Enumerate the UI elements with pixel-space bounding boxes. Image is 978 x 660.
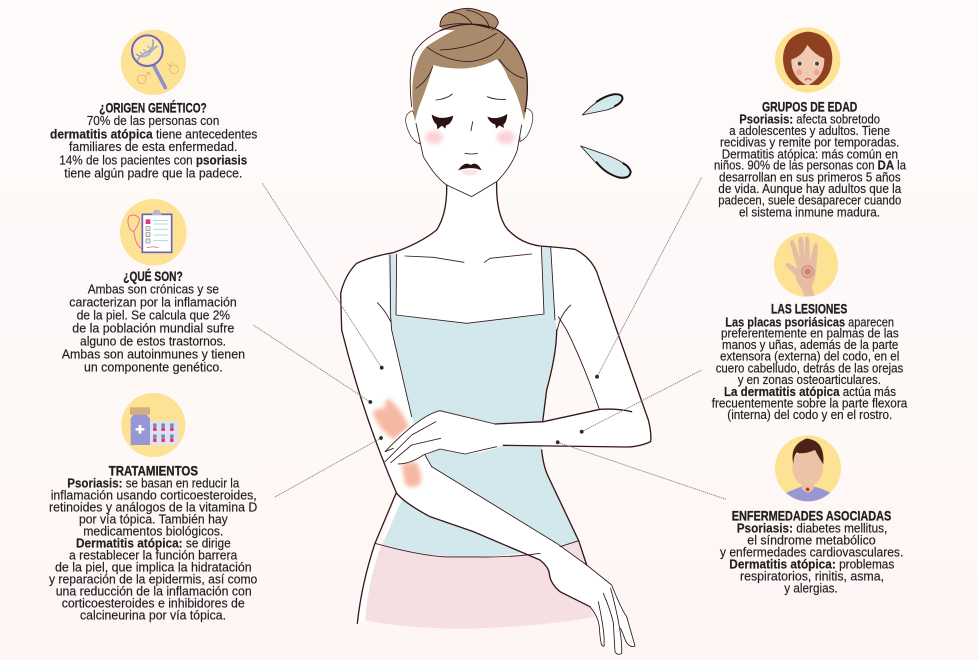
text block: grupos de edad: padecen, suele desaparecer cuando [718,193,901,208]
text block: enfermedades asociadas: y alergias. [784,581,838,596]
neck and chest [396,182,544,323]
skin patches [373,399,421,487]
text block: grupos de edad: GRUPOS DE EDAD [762,99,857,114]
icon: person with throat mark [775,435,841,503]
heading block: tratamientos: retinoides y análogos de la vitamina D [49,499,257,514]
text block: enfermedades asociadas: y enfermedades cardiovasculares. [720,545,903,560]
tear drops [581,94,631,178]
icon: clipboard and stethoscope [120,199,187,266]
text block: las lesiones: preferentemente en palmas de las [721,326,899,341]
text block: grupos de edad: recidivas y remite por temporadas. [720,135,899,150]
icon: magnifier over DNA [121,30,186,95]
heading block: tratamientos: y reparación de la epidermis, así como [49,571,257,586]
heading block: tratamientos: por vía tópica. También hay [79,511,228,526]
heading block: origen genético: dermatitis atópica tiene antecedentes [50,126,258,141]
face [415,57,525,197]
heading block: origen genético: familiares de esta enfermedad. [69,139,237,154]
text block: las lesiones: y en zonas osteoarticulares. [738,372,881,387]
heading block: tratamientos: corticoesteroides e inhibidores de [62,595,245,610]
heading block: tratamientos: de la piel, que implica la hidratación [55,559,252,574]
text block: enfermedades asociadas: respiratorios, rinitis, asma, [740,569,884,584]
heading block: tratamientos: calcineurina por vía tópica. [80,607,226,622]
text block: grupos de edad: de vida. Aunque hay adultos que la [718,181,902,196]
text block: las lesiones [712,302,908,422]
text block: grupos de edad: a adolescentes y adultos. Tiene [729,123,890,138]
heading block: origen genético: 14% de los pacientes con psoriasis [59,152,247,167]
heading block: tratamientos: TRATAMIENTOS [109,464,198,479]
text block: las lesiones: extensora (externa) del codo, en el [720,349,899,364]
text block: las lesiones: frecuentemente sobre la parte flexora [712,395,908,410]
heading block: qué son: Ambas son crónicas y se [88,281,219,296]
heading block: qué son: un componente genético. [84,359,223,374]
icon: hand with lesion [774,233,838,297]
heading block: tratamientos: a restablecer la función barrera [69,547,238,562]
text block: enfermedades asociadas [720,509,903,596]
heading block: qué son: ¿QUÉ SON? [123,269,183,284]
hair bun [440,8,498,31]
text block: enfermedades asociadas: ENFERMEDADES ASOCIADAS [732,509,891,524]
icon: woman with sad face [775,27,840,93]
text block: las lesiones: cuero cabelludo, detrás de las orejas [716,360,904,375]
heading block: origen genético: tiene algún padre que la padece. [64,165,242,180]
leader lines [253,177,726,499]
text block: las lesiones: manos y uñas, además de la parte [722,337,898,352]
heading block: tratamientos: una reducción de la inflamación con [56,583,252,598]
text block: grupos de edad: Dermatitis atópica: más común en [722,146,898,161]
text block: grupos de edad [714,99,907,220]
hair strands [410,8,527,112]
text block: enfermedades asociadas: el síndrome metabólico [747,533,876,548]
illustration: woman with skin lesions [340,8,651,655]
heading block: tratamientos [49,464,257,622]
heading block: tratamientos: Dermatitis atópica: se dirige [76,535,231,550]
body outline [341,123,651,654]
skirt [365,541,595,629]
heading block: qué son: de la población mundial sufre [72,320,234,335]
tank top [382,247,579,557]
text block: enfermedades asociadas: Psoriasis: diabetes mellitus, [737,521,887,536]
text block: grupos de edad: niños. 90% de las personas con DA la [714,158,907,173]
icon: medicine bottle and pills [121,393,185,457]
heading block: origen genético: ¿ORIGEN GENÉTICO? [99,101,207,116]
heading block: origen genético: 70% de las personas con [87,113,219,128]
text block: grupos de edad: Psoriasis: afecta sobretodo [739,111,880,126]
left arm [340,254,635,655]
text block: grupos de edad: el sistema inmune madura. [739,205,880,220]
text block: las lesiones: (interna) del codo y en el rostro. [727,407,892,422]
marker dots [368,366,599,444]
text block: grupos de edad: desarrollan en sus primeros 5 años [719,169,901,184]
text block: las lesiones: Las placas psoriásicas aparecen [725,315,894,330]
text block: las lesiones: La dermatitis atópica actúa más [724,384,896,399]
heading block: qué son: Ambas son autoinmunes y tienen [62,346,245,361]
text block: enfermedades asociadas: Dermatitis atópica: problemas [729,557,895,572]
text block: las lesiones: LAS LESIONES [771,302,847,317]
heading block: tratamientos: Psoriasis: se basan en reducir la [67,475,240,490]
heading block: qué son: alguno de estos trastornos. [80,333,226,348]
hair [412,24,528,122]
heading block: qué son: caracterizan por la inflamación [69,294,237,309]
face features [425,94,515,175]
heading block: tratamientos: inflamación usando corticoesteroides, [51,487,257,502]
lower torso skin [357,493,403,623]
heading block: tratamientos: medicamentos biológicos. [83,523,223,538]
right arm and hand [385,247,651,464]
heading block: qué son: de la piel. Se calcula que 2% [77,307,230,322]
ears [406,108,533,144]
heading block: origen genético [50,101,258,180]
heading block: qué son [62,269,245,374]
